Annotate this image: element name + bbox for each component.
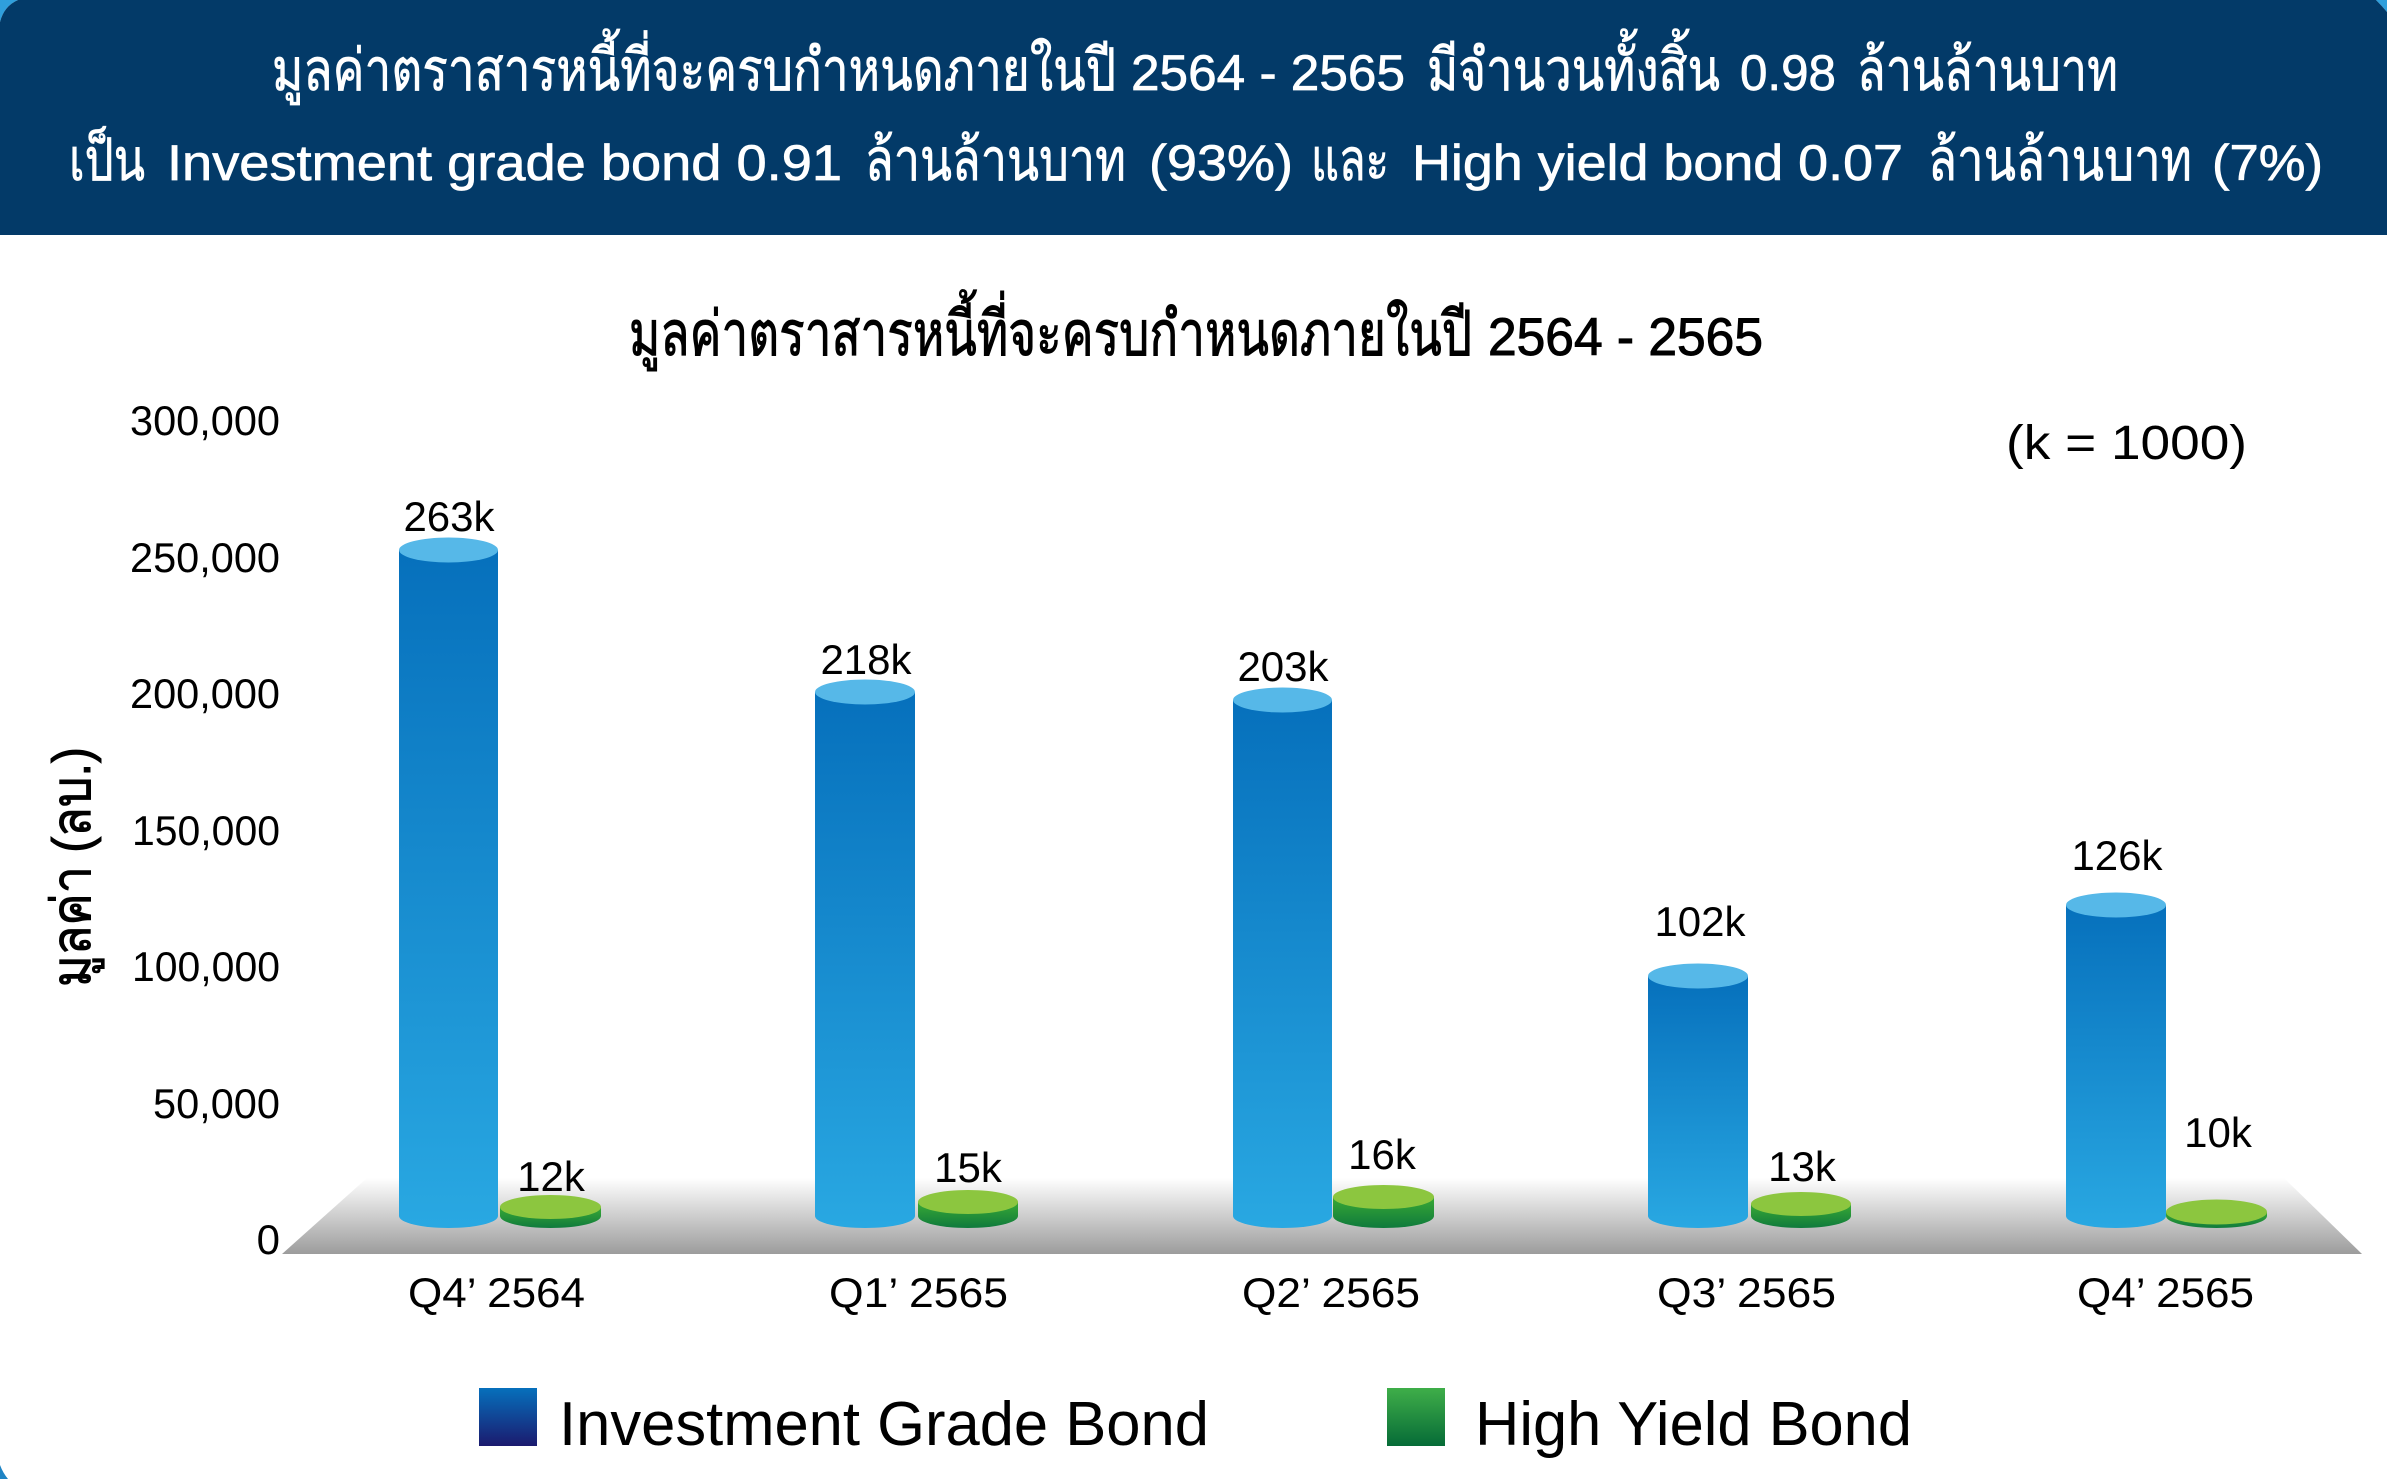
header line 2: Investment grade bond 0.91 xyxy=(167,135,842,191)
bar: investment grade 126k xyxy=(2066,892,2166,1228)
y axis labels: 0 xyxy=(257,1216,280,1263)
y axis labels: 250,000 xyxy=(130,534,280,581)
header line 2: High yield bond 0.07 xyxy=(1412,135,1903,191)
value: 12k: 12k xyxy=(517,1153,586,1200)
legend: high yield label: High Yield Bond xyxy=(1475,1390,1912,1459)
header line 2: และ xyxy=(1311,128,1389,193)
y axis title: มูลค่า (ลบ.) xyxy=(42,747,104,987)
bar: high yield 12k xyxy=(500,1195,601,1228)
chart title: มูลค่าตราสารหนี้ที่จะครบกำหนดภายในปี xyxy=(629,289,1472,371)
bar: high yield 10k xyxy=(2166,1200,2267,1228)
bar: investment grade 102k xyxy=(1648,964,1748,1228)
value: 16k: 16k xyxy=(1348,1131,1417,1178)
value: 13k: 13k xyxy=(1768,1143,1837,1190)
header line 2: ล้านล้านบาท xyxy=(865,128,1126,193)
bar: investment grade 218k xyxy=(815,680,915,1228)
y axis labels xyxy=(130,397,280,1263)
legend xyxy=(479,1388,1912,1459)
x axis labels: Q4’ 2565 xyxy=(2077,1269,2254,1316)
y axis labels: 150,000 xyxy=(132,807,280,854)
x axis labels: Q2’ 2565 xyxy=(1242,1269,1420,1316)
chart bars: Q3 2565 xyxy=(1648,898,1851,1228)
header line 1: 0.98 xyxy=(1740,45,1836,101)
chart bars: Q4 2564 xyxy=(399,493,601,1228)
value: 10k: 10k xyxy=(2184,1109,2253,1156)
y axis labels: 50,000 xyxy=(153,1080,280,1127)
y axis labels: 300,000 xyxy=(130,397,280,444)
bar: high yield 15k xyxy=(918,1190,1018,1228)
header line 2: ล้านล้านบาท xyxy=(1928,128,2192,193)
x axis labels xyxy=(408,1269,2254,1316)
x axis labels: Q3’ 2565 xyxy=(1657,1269,1836,1316)
bar: high yield 16k xyxy=(1333,1185,1434,1228)
value: 102k: 102k xyxy=(1654,898,1747,945)
value: 218k: 218k xyxy=(820,636,913,683)
bar: high yield 13k xyxy=(1751,1192,1851,1228)
header line 2: (93%) xyxy=(1149,135,1293,191)
chart bars: Q1 2565 xyxy=(815,636,1018,1228)
unit note: (k = 1000) xyxy=(2006,417,2247,470)
header line 2: (7%) xyxy=(2212,135,2323,191)
header line 1 xyxy=(272,29,2118,105)
header line 1: ล้านล้านบาท xyxy=(1857,38,2118,103)
bar: investment grade 263k xyxy=(399,538,498,1228)
y axis labels: 200,000 xyxy=(130,670,280,717)
header line 2 xyxy=(69,126,2323,193)
bar: investment grade 203k xyxy=(1233,688,1332,1228)
value: 263k: 263k xyxy=(403,493,496,540)
chart bars: Q4 2565 xyxy=(2066,832,2267,1228)
header line 1: มีจำนวนทั้งสิ้น xyxy=(1427,29,1720,103)
legend: investment grade swatch xyxy=(479,1388,537,1446)
chart floor xyxy=(282,1178,2362,1254)
header banner xyxy=(0,0,2387,235)
chart bars: Q2 2565 xyxy=(1233,643,1434,1228)
chart title: 2564 - 2565 xyxy=(1488,308,1763,367)
legend: investment grade label: Investment Grade Bond xyxy=(559,1390,1209,1459)
x axis labels: Q1’ 2565 xyxy=(829,1269,1008,1316)
legend: high yield swatch xyxy=(1387,1388,1445,1446)
value: 126k: 126k xyxy=(2071,832,2164,879)
x axis labels: Q4’ 2564 xyxy=(408,1269,585,1316)
value: 15k: 15k xyxy=(934,1144,1003,1191)
header line 2: เป็น xyxy=(69,126,145,193)
y axis labels: 100,000 xyxy=(132,943,280,990)
header line 1: 2564 - 2565 xyxy=(1131,45,1405,101)
value: 203k: 203k xyxy=(1237,643,1330,690)
header line 1: มูลค่าตราสารหนี้ที่จะครบกำหนดภายในปี xyxy=(272,29,1116,105)
